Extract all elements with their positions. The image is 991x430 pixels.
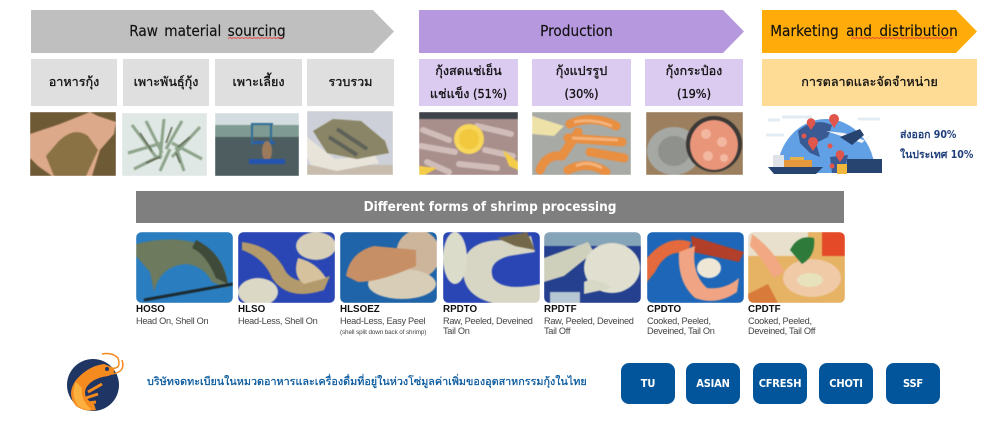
caption: CPDTF: Deveined, Tail Off [748,326,815,336]
caption: HOSO: HOSO [136,304,165,315]
caption: CPDTO [647,304,715,336]
caption: HLSOEZ: Head-Less, Easy Peel [340,316,425,326]
label: processed shrimp: (30%) [564,86,598,100]
photo: canned shrimp [646,112,743,175]
arrow: production [419,10,744,53]
caption: CPDTO: Deveined, Tail On [647,326,715,336]
photo: shrimp larvae [122,113,207,176]
arrow: raw material sourcing [31,10,394,53]
caption: HOSO: Head On, Shell On [136,316,208,326]
caption: CPDTF: Cooked, Peeled, [748,316,812,326]
label: shrimp breeding [123,59,209,106]
photo: HLSOEZ [340,232,437,303]
label: chilled and frozen shrimp: แช่แข็ง (51%) [430,86,507,100]
caption: CPDTF [748,304,816,336]
label: shrimp feed: อาหารกุ้ง [49,74,99,89]
label: shrimp farming [215,59,302,106]
text: registered companies description: บริษัทจดทะเบียนในหมวดอาหารและเครื่องดื่มที่อยู่ในห่วงโซ่มูลค่าเพิ่มของอุตสาหกรรมกุ้งในไทย [147,375,587,388]
button: TU: TU [641,377,655,390]
button: CFRESH: CFRESH [759,377,801,390]
illustration: global logistics map [766,114,882,174]
label: processed shrimp [532,59,631,106]
text: export and domestic shares [900,129,973,161]
photo: shrimp farm pond [215,113,299,176]
caption: RPDTF: Raw, Peeled, Deveined [544,316,634,326]
button: TU [621,363,675,404]
banner: different forms of shrimp processing: Different forms of shrimp processing [364,199,616,215]
label: shrimp feed [31,59,117,106]
photo: frozen shrimp with lemon [419,112,518,175]
label: chilled and frozen shrimp [419,59,518,106]
caption: RPDTF [544,304,634,336]
button: CHOTI [819,363,873,404]
label: shrimp farming: เพาะเลี้ยง [232,74,284,89]
photo: CPDTO [647,232,744,303]
caption: CPDTO: Cooked, Peeled, [647,316,711,326]
button: CHOTI: CHOTI [829,377,863,390]
button: CFRESH [753,363,807,404]
arrow: marketing and distribution [762,10,977,53]
caption: HLSO [238,304,318,326]
button: SSF: SSF [903,377,923,390]
caption: CPDTF: CPDTF [748,304,781,315]
label: canned shrimp: (19%) [677,86,711,100]
arrow: raw material sourcing: Raw material sourcing [129,22,286,40]
label: collection [307,59,394,106]
label: shrimp breeding: เพาะพันธุ์กุ้ง [134,74,198,89]
caption: RPDTO [443,304,533,336]
label: marketing and distribution: การตลาดและจัดจำหน่าย [801,74,938,89]
caption: HOSO [136,304,208,326]
label: chilled and frozen shrimp: กุ้งสดแช่เย็น [435,62,502,78]
caption: RPDTF: RPDTF [544,304,577,315]
caption: CPDTO: CPDTO [647,304,681,315]
caption: HLSOEZ: (shell split down back of shrimp) [340,329,426,336]
photo: harvested shrimp in gloved hand [307,111,393,175]
label: collection: รวบรวม [329,74,372,89]
banner: different forms of shrimp processing [136,191,844,223]
photo: shrimp feed in hand [30,112,116,176]
caption: RPDTO: Raw, Peeled, Deveined [443,316,533,326]
button: ASIAN [686,363,740,404]
photo: HLSO [238,232,335,303]
text: export and domestic shares: ส่งออก 90% [900,129,956,141]
photo: HOSO [136,232,233,303]
icon: shrimp logo [67,352,124,411]
photo: processed cooked shrimp [532,112,631,175]
button: SSF [886,363,940,404]
text: export and domestic shares: ในประเทศ 10% [900,149,973,161]
caption: RPDTO: RPDTO [443,304,477,315]
caption: RPDTO: Tail On [443,326,470,336]
caption: HLSO: Head-Less, Shell On [238,316,317,326]
arrow: production: Production [540,22,613,40]
button: ASIAN: ASIAN [696,377,730,390]
caption: HLSOEZ [340,304,426,336]
caption: RPDTF: Tail Off [544,326,570,336]
arrow: marketing and distribution: Marketing and distribution [770,22,958,40]
label: canned shrimp [645,59,743,106]
photo: CPDTF [748,232,845,303]
label: canned shrimp: กุ้งกระป๋อง [666,62,722,78]
caption: HLSO: HLSO [238,304,265,315]
label: processed shrimp: กุ้งแปรรูป [556,62,607,78]
photo: RPDTF [544,232,641,303]
photo: RPDTO [443,232,540,303]
label: marketing and distribution [762,59,977,106]
caption: HLSOEZ: HLSOEZ [340,304,380,315]
